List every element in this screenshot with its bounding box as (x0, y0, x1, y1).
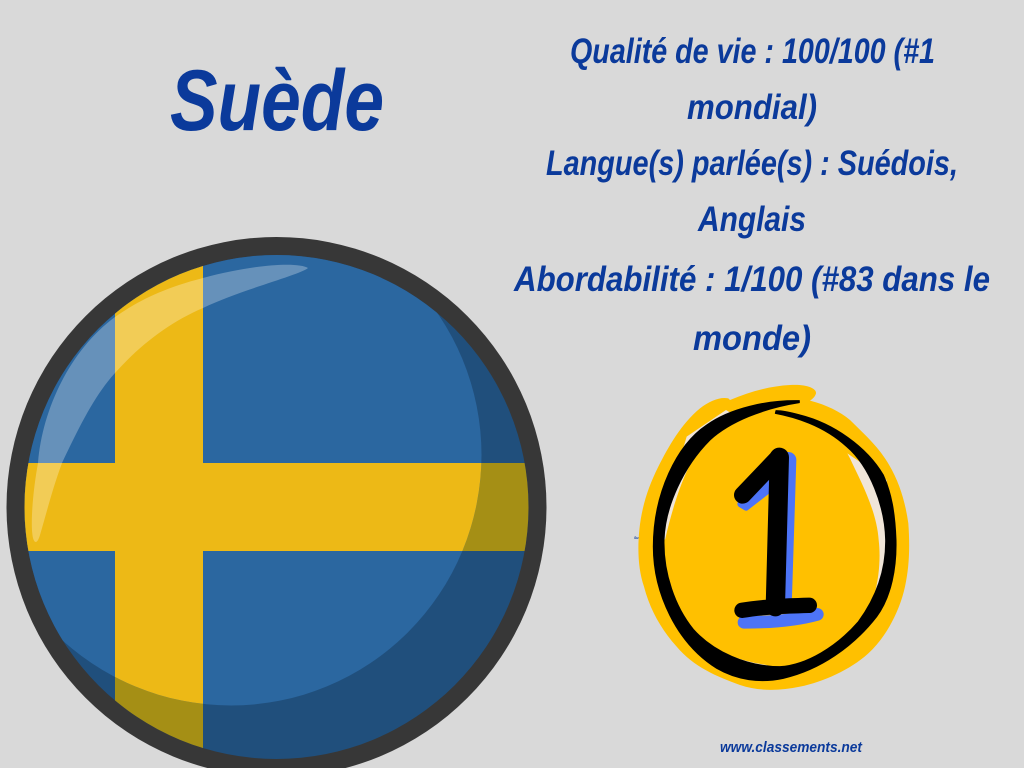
glossy highlight (32, 265, 308, 542)
flag lit layer (24, 255, 482, 706)
fact: affordability: monde) (693, 319, 811, 358)
fact: quality of life (570, 32, 935, 127)
hand-drawn black ring (653, 401, 896, 681)
badge yellow disc (638, 385, 909, 690)
fact: quality of life: Qualité de vie : 100/100 (#1 (570, 32, 935, 71)
numeral shadow (741, 460, 817, 622)
tiny country label: Suède (634, 536, 644, 540)
text block: country facts (513, 32, 990, 358)
numeral one (742, 457, 809, 610)
cream highlight arcs (660, 410, 890, 673)
flag shaded layer (24, 255, 528, 759)
website footer: www.classements.net (720, 740, 863, 756)
fact: languages (546, 144, 958, 239)
fact: languages: Anglais (697, 200, 806, 239)
icon: number one badge (638, 385, 909, 690)
fact: quality of life: mondial) (687, 88, 817, 127)
title: Suède (170, 53, 384, 149)
icon: Swedish flag button (0, 200, 560, 768)
fact: affordability (513, 260, 990, 358)
